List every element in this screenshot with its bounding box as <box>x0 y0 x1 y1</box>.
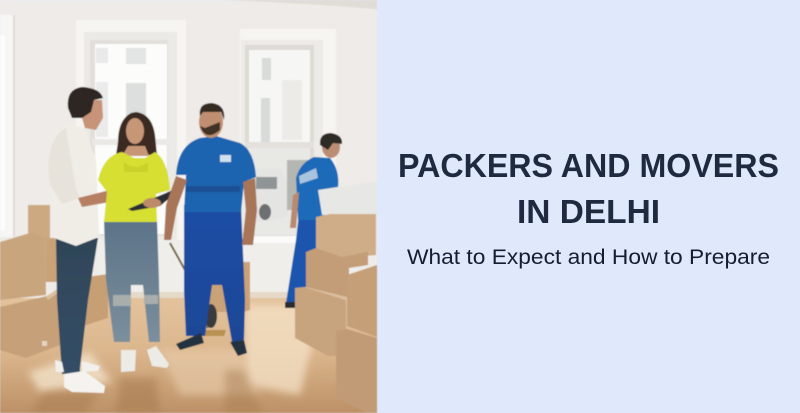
hand truck and box behind mover <box>170 243 250 336</box>
mover at back <box>285 133 377 308</box>
subtitle: What to Expect and How to Prepare <box>407 246 770 269</box>
floor <box>0 298 377 413</box>
room wall <box>0 0 377 300</box>
title line 2: IN DELHI <box>517 193 660 230</box>
right window <box>240 29 336 244</box>
mover in blue uniform <box>164 103 257 356</box>
centre window <box>76 20 186 245</box>
window sill and skirting <box>98 240 358 298</box>
background panel <box>377 0 800 413</box>
left window <box>0 15 15 237</box>
woman in yellow top <box>98 112 182 372</box>
ceiling moulding <box>225 0 377 9</box>
title <box>398 147 779 230</box>
photo: movers in an empty room <box>0 0 377 413</box>
title line 1: PACKERS AND MOVERS <box>398 147 779 184</box>
boxes left <box>0 205 108 358</box>
boxes right <box>295 214 377 413</box>
man in white shirt and jeans <box>48 87 133 393</box>
parked van outside <box>254 168 289 222</box>
